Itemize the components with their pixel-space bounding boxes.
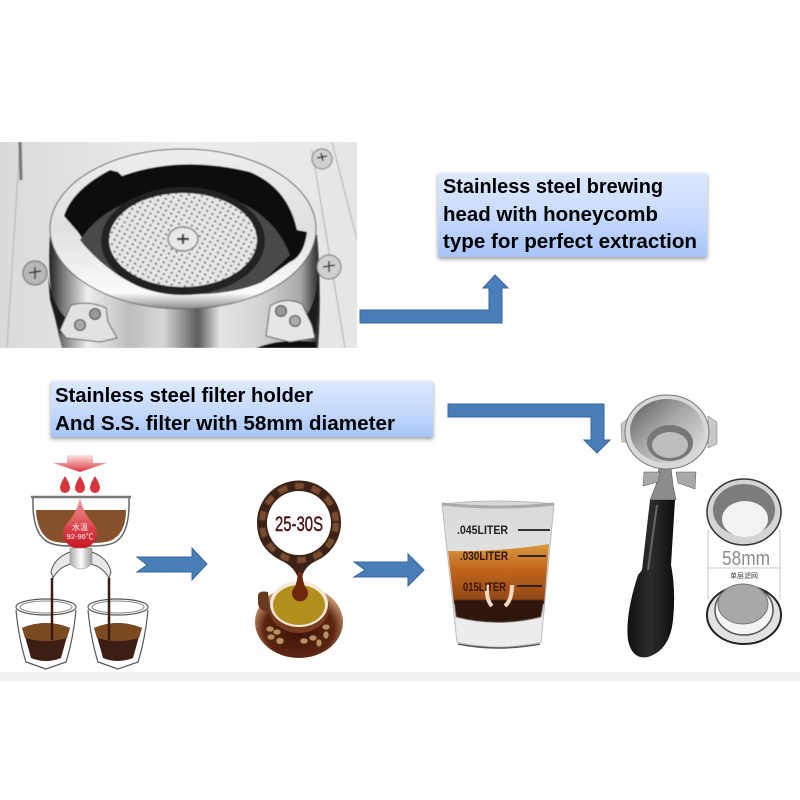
photo: portafilter with handle (621, 395, 717, 657)
arrow: filter holder callout to portafilter (448, 404, 610, 453)
chrome neck (650, 468, 676, 500)
filter basket with coffee (31, 497, 131, 546)
callout: filter holder (51, 381, 433, 437)
top rim ring (50, 149, 316, 309)
icon: red pressure arrow (53, 455, 107, 472)
right mounting bracket (266, 300, 315, 342)
illustration: water extraction into two cups (16, 455, 148, 669)
callout: brewing head: Stainless steel brewing (443, 176, 663, 198)
water temperature drop: 92-96℃ (67, 532, 94, 541)
callout: filter holder: And S.S. filter with 58mm diameter (55, 413, 395, 435)
footer band (0, 672, 800, 681)
arrow: photo to brewing head callout (360, 275, 508, 323)
filter bowl (625, 395, 709, 469)
lower lugs (643, 472, 696, 489)
coffee beans on saucer (266, 624, 330, 647)
arrow: extraction to timer (137, 548, 207, 580)
water temperature drop: 水温 (72, 522, 88, 532)
58mm dimension label: 58mm (722, 548, 770, 570)
metal body of the head (49, 235, 320, 348)
illustration: shot glass with measure lines (442, 501, 554, 648)
saucer (255, 586, 343, 658)
callout: filter holder: Stainless steel filter holder (55, 385, 313, 407)
water temperature drop (63, 498, 97, 549)
left cup (16, 599, 76, 669)
right cup (88, 599, 148, 669)
cup (258, 581, 329, 633)
callout: brewing head (438, 173, 707, 257)
photo: filter basket top view (707, 479, 781, 545)
central screw (168, 227, 198, 251)
side tabs (621, 416, 717, 448)
arrow: timer to shot glass (354, 554, 424, 586)
58mm dimension label (708, 530, 780, 600)
measure label .045: .045LITER (457, 525, 509, 537)
honeycomb filter disc (109, 193, 257, 287)
bean ring timer (257, 481, 341, 578)
icon: three water drops (60, 476, 100, 493)
black inner cavity (64, 164, 307, 294)
bean ring timer: 25-30S (275, 513, 323, 536)
black handle (627, 500, 675, 657)
callout: brewing head: head with honeycomb (443, 204, 658, 226)
measure label .030: .030LITER (460, 551, 509, 563)
dark coffee layer (454, 600, 544, 622)
photo: stainless steel brewing head (0, 142, 357, 348)
measure label .015: 015LITER (463, 582, 507, 594)
callout: brewing head: type for perfect extraction (443, 231, 697, 253)
58mm dimension label: 单层滤网 (730, 571, 758, 580)
coffee streams (52, 578, 109, 640)
crema layer (448, 544, 549, 604)
photo: filter basket bottom view (707, 584, 781, 644)
illustration: 25-30 second coffee cup (255, 481, 343, 658)
panel screws (312, 149, 332, 169)
glass base (455, 618, 542, 646)
spout (51, 548, 111, 578)
left mounting bracket (60, 303, 117, 342)
falling coffee drop (292, 572, 308, 601)
